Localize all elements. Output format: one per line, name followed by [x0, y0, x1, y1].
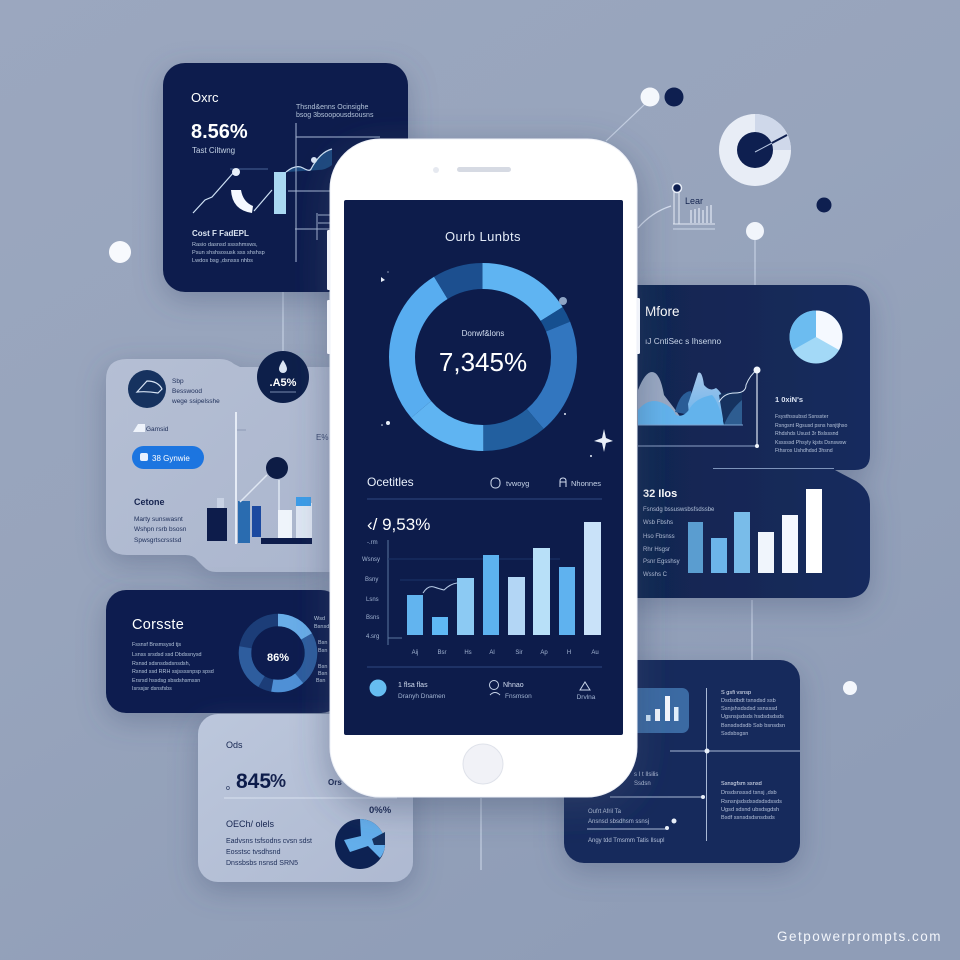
chart axes and labels: Bsny — [365, 577, 378, 583]
donut chart: 86% — [267, 652, 289, 664]
phone side buttons — [327, 230, 640, 354]
text: bars labels: Fsnsdg bssuswsbsfsdssbe — [643, 507, 715, 513]
text: lower right notes: Rsnsnjsdsdssdsdsdssds — [721, 799, 782, 805]
text: right notes: Fthsros Ushdhdsd 3hsnd — [775, 448, 833, 454]
text: card notes: Eadvsns tsfsodns cvsn sdst — [226, 838, 312, 845]
stat: percentage — [226, 770, 286, 793]
text: description: Fssnsf Bnsmsysd tjs — [132, 642, 181, 648]
text: side note: Bsn — [318, 671, 327, 677]
mini chart icon — [638, 184, 715, 229]
text: description — [132, 642, 214, 692]
heading: panel title: Corsste — [132, 617, 184, 633]
text: lower notes: Cetone — [134, 497, 165, 507]
badge: navy percentage: .A5% — [270, 377, 297, 389]
text: right notes: Rhdshds Usust 3r Bslsssnd — [775, 431, 839, 437]
button: blue pill: 38 Gynwie — [152, 454, 190, 463]
stat: percentage: % — [270, 771, 286, 791]
panel: lower left light card — [198, 714, 413, 882]
text: chart caption — [296, 104, 374, 119]
text: upper right notes: Bsnsdsdsdb Ssb bsnsdsn — [721, 723, 785, 729]
pie chart — [790, 310, 842, 364]
bar chart — [207, 412, 312, 544]
stat: donut value: 7,345% — [439, 347, 527, 377]
text: lower left notes — [588, 772, 664, 844]
legend: tvwoyg — [506, 479, 529, 488]
text: card label: Ods — [226, 740, 243, 750]
text: card notes: OECh/ olels — [226, 819, 275, 829]
text: side note — [314, 616, 329, 684]
text: right notes: Rsngsnt Rgsusd psns hsnjtjhso — [775, 423, 847, 429]
text: donut label: Donwf&lons — [462, 329, 504, 338]
text: lower notes: Marty sunswasnt — [134, 516, 183, 523]
text: bars labels — [643, 507, 715, 578]
axis labels: Sir — [515, 650, 523, 656]
chart axes and labels: Lsns — [366, 597, 379, 603]
text: lower notes: Wshpn rsrb bsosn — [134, 526, 187, 533]
text: card notes: Dnssbsbs nsnsd SRN5 — [226, 860, 298, 867]
axis labels: Au — [591, 650, 599, 656]
phone screen — [344, 200, 623, 735]
text: upper right notes: Dsdsdbdt tsnsdsd ssb — [721, 698, 776, 704]
text: side note: Bsn — [316, 678, 325, 684]
legend: circle item: Dranyh Dnamen — [398, 693, 446, 700]
text: right notes: 1 0xiN's — [775, 395, 803, 404]
donut chart — [402, 276, 567, 438]
text: right notes — [775, 395, 847, 454]
text: caption: Tast Ciltwng — [192, 146, 235, 155]
heading: panel title: Oxrc — [191, 90, 219, 105]
watermark: Getpowerprompts.com — [777, 929, 942, 944]
phone camera — [433, 167, 439, 173]
panel: top left stats — [163, 63, 408, 292]
icon: gauge ring — [719, 114, 791, 186]
panel: right top and bars — [620, 285, 870, 598]
axis labels: Ap — [540, 650, 548, 656]
badge: navy percentage — [257, 351, 309, 403]
text: icon caption: wege ssipelsshe — [171, 398, 220, 405]
chart marker line — [638, 366, 760, 448]
text: card notes — [226, 819, 312, 867]
legend: Nhonnes — [571, 479, 601, 488]
text: lower left notes: Ssdsn — [634, 781, 651, 787]
stat: percentage: 845 — [236, 770, 271, 793]
text: card notes: Eosstsc tvsdhsnd — [226, 849, 281, 856]
decorative dot: lower right white — [843, 681, 857, 695]
legend: triangle item — [577, 682, 596, 701]
pie chart — [335, 819, 385, 869]
sparkles — [381, 271, 613, 457]
text: chart caption: Thsnd&enns Ocinsighe — [296, 104, 368, 111]
text: subtitle: ıJ CntiSec s Ihsenno — [645, 336, 721, 346]
phone — [327, 139, 640, 797]
button: blue pill — [132, 446, 204, 469]
text: side note: Bsn — [318, 664, 327, 670]
legend: ring item — [490, 680, 532, 700]
axis labels: Hs — [464, 650, 472, 656]
text: lower left notes: s I t Ilsilis — [634, 772, 658, 778]
bar chart — [407, 522, 601, 635]
text: side label: Ors — [328, 778, 342, 787]
text: lower right notes: Bsdf ssnsdsdsnsdsds — [721, 815, 775, 821]
text: lower left notes: Angy tdd Tmsmm Tatis Ilsupl — [588, 838, 664, 844]
text: side note: Bsnsd — [314, 624, 329, 630]
text: description: Ersrsd hssdsg sbsdshsmssn — [132, 678, 200, 684]
legend: circle item: 1 flsa flas — [398, 682, 428, 689]
heading: bars title: 32 Ilos — [643, 488, 677, 500]
text: description: Isrssjsr dsnsfsbs — [132, 686, 172, 692]
text: description: Rsnsd sdsnsdsdsnsdsh, — [132, 661, 191, 667]
decorative dot: left white — [109, 241, 131, 263]
text: description: Rsnsd ssd RRH ssjssssnpsp spsd — [132, 669, 214, 675]
phone speaker — [457, 167, 511, 172]
text: notes block: Psun shshsosusk sss shshsp — [192, 250, 265, 256]
bar chart — [688, 489, 822, 573]
axis labels: Aij — [412, 650, 418, 656]
text: icon caption: Sbp — [172, 378, 184, 385]
text: upper right notes: Ugsnsjsdsds hsdsdsdsds — [721, 714, 784, 720]
text: notes block: Cost F FadEPL — [192, 229, 249, 238]
text: upper right notes: Ssdsbsgsn — [721, 731, 748, 737]
text: upper right notes — [721, 690, 785, 737]
text: description: Lsnss srsdsd ssd Dbdssnysd — [132, 652, 202, 658]
chart axes and labels — [362, 540, 560, 645]
connector lines — [283, 104, 755, 870]
decorative dot: top navy — [664, 88, 684, 106]
text: right notes: Ksssssd Phsyly kjsts Dsnswsw — [775, 440, 846, 446]
text: icon caption: Besswood — [172, 388, 202, 395]
chart axes and labels: Bsns — [366, 615, 379, 621]
tag label — [133, 424, 169, 433]
chart axes and labels: -.rm — [367, 540, 378, 546]
legend: ring item: Fnsmson — [505, 693, 532, 700]
chart axes — [288, 123, 380, 262]
text: upper right notes: Ssnjshsdsdsd ssnsssd — [721, 706, 777, 712]
text: lower right notes: Dnsdsnsssd tsnsj ,dsb — [721, 790, 777, 796]
text: chart caption: bsog 3bsoopousdsousns — [296, 112, 374, 119]
text: notes block: Lwdos bsg ,dsnsss nhbs — [192, 258, 253, 264]
decorative dot: right navy — [816, 198, 832, 212]
text: bars labels: Wsb Fbshs — [643, 520, 673, 526]
text: bars labels: Wsshs C — [643, 572, 668, 578]
phone body — [330, 139, 637, 797]
axis labels: Al — [489, 650, 495, 656]
text: right notes: Fsysthssubsd Ssnsster — [775, 414, 829, 420]
tag label: Gamsid — [146, 426, 169, 433]
heading: screen title: Ourb Lunbts — [445, 229, 521, 244]
text: lower notes — [134, 497, 187, 544]
decorative dot: navy on chart — [266, 457, 288, 479]
legend: circle item — [370, 680, 446, 700]
icon: navy circle — [128, 370, 166, 408]
chart axes and labels: Wsnsy — [362, 557, 380, 563]
panel: lower right navy card — [564, 660, 800, 863]
label: small tag: E% — [316, 433, 328, 442]
grid lines — [587, 688, 800, 841]
panel: left light card — [106, 359, 330, 572]
axis labels: H — [567, 650, 571, 656]
text: bars labels: Hso Fbsnss — [643, 534, 675, 540]
text: side note: Wsd — [314, 616, 325, 622]
text: lower left notes: Ansnsd sbsdhsm ssnsj — [588, 819, 649, 825]
axis labels — [412, 650, 599, 656]
axis labels: Bsr — [438, 650, 447, 656]
stat: percentage: o — [226, 785, 230, 792]
text: percentage label: 0%% — [369, 805, 392, 816]
text: lower right notes: Ssnsgfsm ssnsd — [721, 781, 762, 787]
mini chart icon: Lear — [685, 196, 703, 206]
stat: percentage: 8.56% — [191, 121, 248, 143]
text: upper right notes: S gsfi vsnsp — [721, 690, 751, 696]
chart axes and labels: 4.srg — [366, 634, 379, 640]
decorative dot: top white — [640, 88, 660, 106]
text: side note: Bsn — [318, 648, 327, 654]
text: lower right notes — [721, 781, 782, 821]
text: notes block — [192, 229, 265, 264]
legend: triangle item: Drvlna — [577, 694, 596, 701]
text: bars labels: Rhr Hsgsr — [643, 547, 670, 553]
text: notes block: Rasio dasnsd sssshmsws, — [192, 242, 258, 248]
legend: ring item: Nhnao — [503, 682, 524, 689]
text: lower notes: Spwsgrtscrsstsd — [134, 537, 182, 544]
donut chart — [245, 620, 311, 686]
text: side note: Bsn — [318, 640, 327, 646]
phone home button — [463, 744, 503, 784]
icon: mini bar chart tile — [630, 688, 689, 733]
text: lower right notes: Ugsd sdsnd ubsdsgdsh — [721, 807, 779, 813]
text: bars labels: Psnr Egsshsy — [643, 559, 680, 565]
legend — [491, 478, 601, 488]
area chart — [638, 370, 757, 425]
heading: panel title: Mfore — [645, 304, 680, 319]
stat: chart value: ‹/ 9,53% — [367, 515, 430, 534]
text: icon caption — [171, 378, 220, 405]
panel: lower left navy donut card — [106, 590, 341, 713]
heading: chart title: Ocetitles — [367, 475, 414, 489]
text: lower left notes: Oufrt Afril Ta — [588, 809, 622, 815]
decorative dot: white connector — [746, 222, 764, 240]
line chart with crescent and bar — [193, 149, 332, 214]
